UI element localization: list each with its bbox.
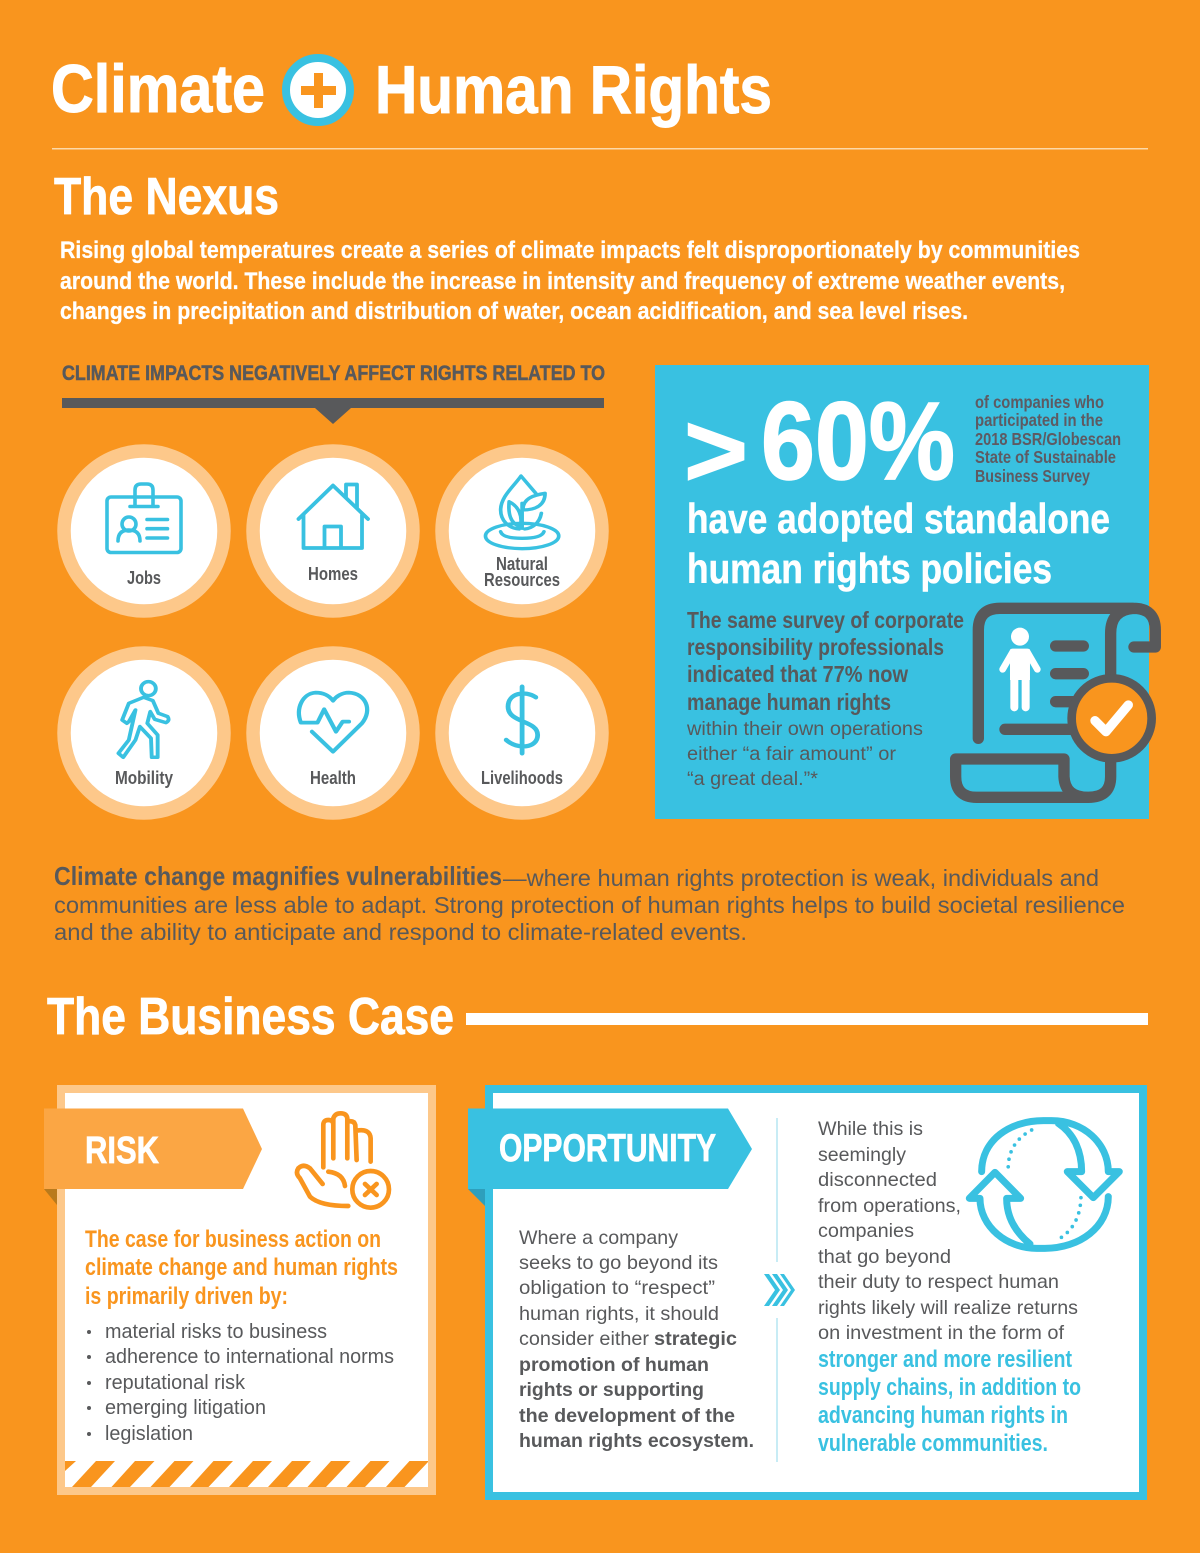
statistic note: 2018 BSR/Globescan [975, 429, 1121, 449]
icon: hand with cross [297, 1113, 389, 1208]
circle: Jobs: Jobs [127, 568, 161, 588]
opportunity highlight text [818, 1346, 1081, 1457]
big statistic: 60% [761, 380, 955, 503]
intro paragraph: changes in precipitation and distribution of water, ocean acidification, and sea level rises. [60, 298, 968, 325]
vulnerability paragraph: and the ability to anticipate and respond to climate-related events. [54, 919, 747, 945]
risk heading: The case for business action on [85, 1226, 381, 1253]
opportunity right text: that go beyond [818, 1246, 951, 1268]
ribbon: risk: RISK [85, 1130, 159, 1172]
statistic note: participated in the [975, 410, 1103, 430]
title: Human Rights [375, 52, 772, 128]
survey text: responsibility professionals [687, 634, 944, 660]
heading: The Business Case: The Business Case [47, 988, 454, 1046]
survey text: manage human rights [687, 689, 891, 715]
circle: Homes [253, 451, 413, 611]
circle: Natural Resources: Resources [484, 570, 560, 590]
opportunity right text: from operations, [818, 1195, 961, 1217]
panel: opportunity [468, 1089, 1143, 1496]
icon: plus in circle [286, 58, 350, 122]
heading: The Nexus: The Nexus [54, 168, 279, 226]
opportunity left text: strategic [654, 1328, 737, 1350]
statistic headline: have adopted standalone [687, 495, 1110, 542]
risk heading: is primarily driven by: [85, 1283, 288, 1310]
survey text: “a great deal.”* [687, 768, 818, 790]
opportunity highlight text: supply chains, in addition to [818, 1374, 1081, 1401]
opportunity right text: on investment in the form of [818, 1322, 1065, 1344]
opportunity left text: Where a company [519, 1227, 678, 1249]
risk list [87, 1321, 394, 1445]
risk heading: climate change and human rights [85, 1254, 398, 1281]
opportunity left text: human rights, it should [519, 1303, 719, 1325]
opportunity left text: rights or supporting [519, 1379, 704, 1401]
icon: cycle arrows [969, 1121, 1119, 1248]
ribbon: opportunity [468, 1108, 752, 1206]
statistic headline [687, 495, 1110, 592]
circle: Mobility: Mobility [115, 768, 173, 788]
circle: Natural Resources [442, 451, 602, 611]
heading: The Business Case [47, 988, 1148, 1046]
big statistic: > [684, 393, 748, 509]
opportunity right text: their duty to respect human [818, 1271, 1059, 1293]
opportunity left text: promotion of human [519, 1354, 709, 1376]
vulnerability paragraph [54, 861, 1125, 945]
panel: rights circles [64, 451, 602, 813]
panel: survey statistic [655, 365, 1155, 819]
vulnerability paragraph: Climate change magnifies vulnerabilities [54, 861, 502, 891]
opportunity right text: disconnected [818, 1169, 937, 1191]
statistic headline: human rights policies [687, 545, 1052, 592]
risk list: material risks to business [105, 1321, 327, 1343]
statistic note [975, 392, 1121, 486]
opportunity left text: human rights ecosystem. [519, 1430, 754, 1452]
hazard stripes [65, 1461, 428, 1487]
circle: Livelihoods: Livelihoods [481, 768, 563, 788]
risk list: reputational risk [105, 1372, 246, 1394]
opportunity right text: companies [818, 1220, 914, 1242]
ribbon: opportunity: OPPORTUNITY [499, 1127, 716, 1170]
opportunity left text: consider either [519, 1328, 650, 1350]
survey text: within their own operations [686, 718, 923, 740]
survey text: either “a fair amount” or [687, 743, 897, 765]
opportunity right text: rights likely will realize returns [818, 1297, 1078, 1319]
opportunity highlight text: advancing human rights in [818, 1402, 1068, 1429]
circle: Natural Resources: Natural [496, 554, 548, 574]
intro paragraph: Rising global temperatures create a series of climate impacts felt disproportionately by communities [60, 237, 1080, 264]
statistic note: State of Sustainable [975, 447, 1116, 467]
survey text: indicated that 77% now [687, 661, 908, 687]
icon: chevrons [764, 1274, 795, 1306]
title [51, 51, 772, 128]
risk heading [85, 1226, 398, 1310]
survey text: The same survey of corporate [687, 607, 964, 633]
opportunity right text: While this is [818, 1118, 923, 1140]
opportunity right text: seemingly [818, 1144, 906, 1166]
opportunity left text: seeks to go beyond its [519, 1252, 718, 1274]
circle: Jobs [64, 451, 224, 611]
statistic note: of companies who [975, 392, 1104, 412]
risk list: legislation [105, 1423, 193, 1445]
risk list: adherence to international norms [105, 1346, 394, 1368]
statistic note: Business Survey [975, 466, 1090, 486]
vulnerability paragraph: communities are less able to adapt. Strong protection of human rights helps to build societal resilience [54, 892, 1125, 918]
panel: risk [44, 1089, 432, 1491]
opportunity left text: the development of the [519, 1405, 735, 1427]
vulnerability paragraph: —where human rights protection is weak, individuals and [503, 865, 1099, 891]
opportunity highlight text: stronger and more resilient [818, 1346, 1072, 1373]
opportunity highlight text: vulnerable communities. [818, 1430, 1048, 1457]
ribbon: risk [44, 1108, 262, 1205]
circle: Livelihoods [442, 653, 602, 813]
intro paragraph: around the world. These include the increase in intensity and frequency of extreme weather events, [60, 268, 1065, 295]
opportunity left text [519, 1227, 754, 1452]
circle: Health [253, 653, 413, 813]
big statistic [684, 380, 955, 509]
circle: Health: Health [310, 768, 356, 788]
circle: Mobility [64, 653, 224, 813]
risk list: emerging litigation [105, 1397, 266, 1419]
icon: scroll with person and check [956, 608, 1155, 797]
circle: Homes: Homes [308, 564, 358, 584]
intro paragraph [60, 237, 1080, 325]
subheading with pointer bar [62, 362, 605, 424]
subheading with pointer bar: CLIMATE IMPACTS NEGATIVELY AFFECT RIGHTS RELATED TO [62, 362, 605, 385]
title: Climate [51, 51, 265, 127]
opportunity left text: obligation to “respect” [519, 1277, 715, 1299]
survey text [686, 607, 964, 790]
opportunity right text [818, 1118, 1078, 1344]
